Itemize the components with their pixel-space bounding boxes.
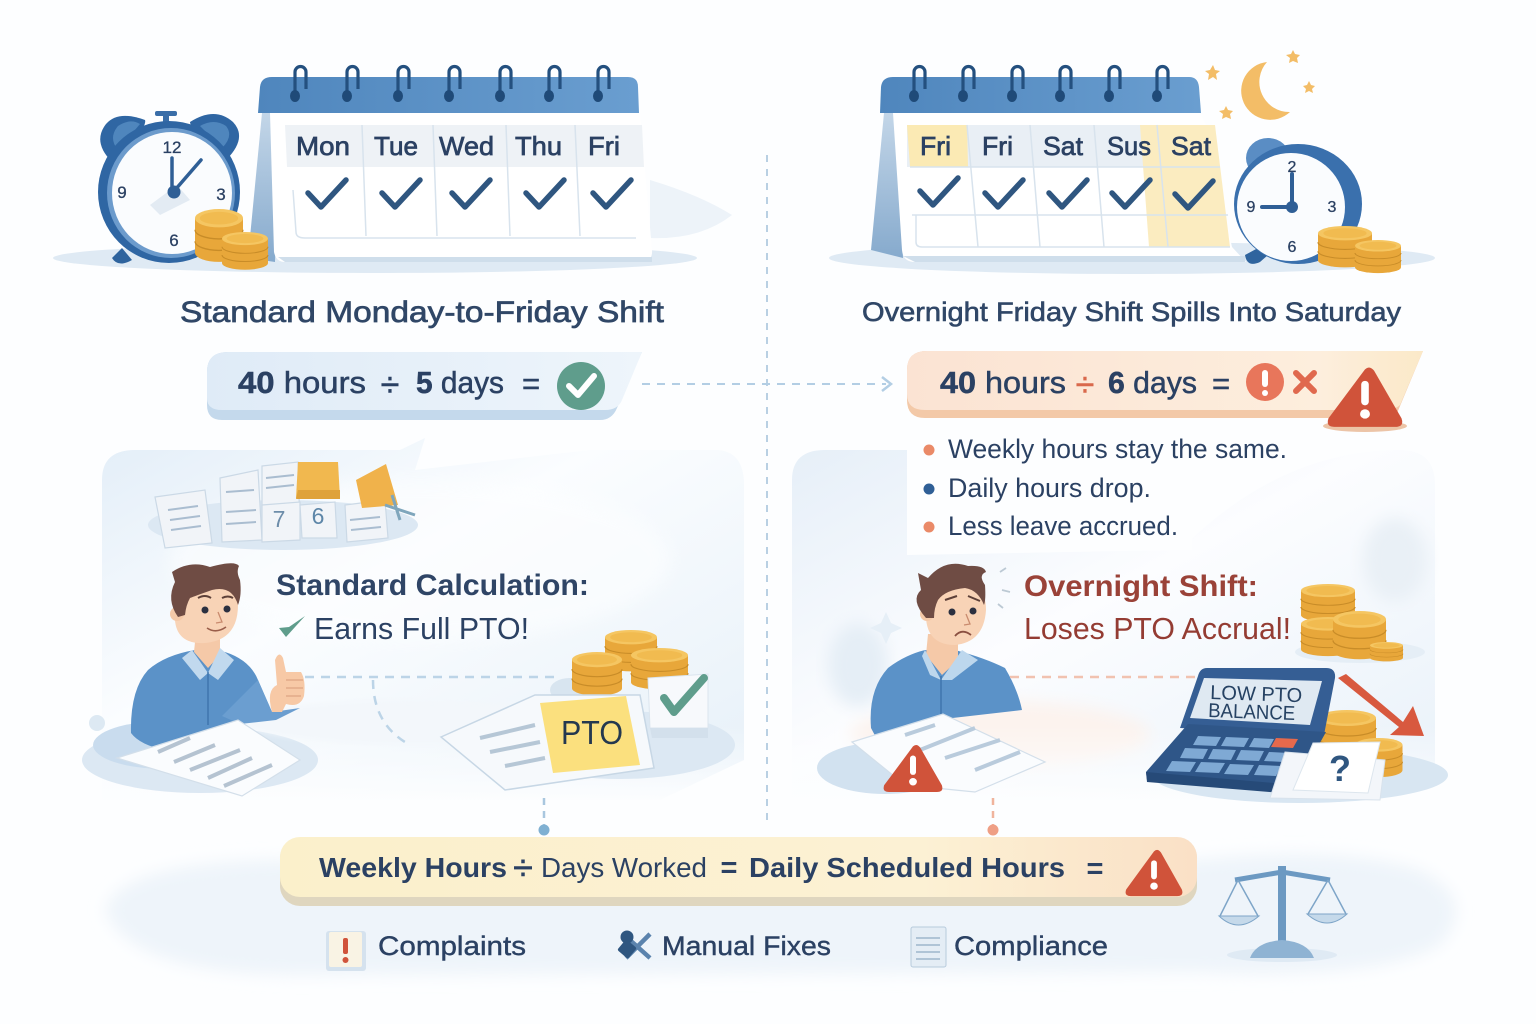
heading: standard shift: Standard Monday-to-Friday Shift [180, 296, 665, 329]
item: complaints: Complaints [378, 931, 526, 961]
left calendar: Tue [374, 131, 418, 161]
left alarm clock with coins [98, 111, 268, 270]
right alarm clock with coins [1234, 138, 1401, 273]
summary formula bar [280, 837, 1197, 906]
formula pill: standard: 40 hours [238, 365, 366, 400]
icon: coins right [1295, 584, 1425, 663]
left alarm clock with coins: 6 [169, 231, 179, 250]
text: earns full PTO: Earns Full PTO! [314, 611, 529, 646]
right alarm clock with coins: 2 [1288, 159, 1297, 176]
connector: overnight dashed line [1010, 676, 1200, 678]
card with green check [648, 674, 708, 738]
icon: paper and calendar pile [148, 462, 418, 550]
PTO coins [572, 630, 688, 696]
right calendar: Sat [1171, 131, 1212, 161]
bullet list: Less leave accrued. [948, 511, 1178, 541]
right alarm clock with coins: 9 [1247, 199, 1256, 216]
calculator: BALANCE [1208, 700, 1296, 725]
formula pill: standard [207, 352, 642, 420]
summary formula bar: ÷ [513, 847, 533, 888]
heading: overnight shift result: Overnight Shift: [1024, 570, 1258, 603]
right calendar [871, 66, 1246, 262]
formula pill: standard: ÷ [381, 366, 399, 404]
formula pill: overnight: 40 hours [940, 365, 1066, 400]
left calendar: Thu [515, 131, 562, 161]
formula pill: overnight: 6 days [1108, 365, 1197, 400]
shadow under right calendar [829, 242, 1435, 274]
paper: left document [117, 720, 300, 796]
item: compliance [911, 927, 1108, 967]
connector: left dashed path [305, 677, 555, 745]
arrow: downward red [1338, 674, 1424, 736]
item: compliance: Compliance [954, 931, 1108, 961]
formula pill: overnight: ÷ [1076, 366, 1094, 404]
formula pill: overnight: = [1212, 366, 1230, 401]
icon: balance scale [1219, 866, 1347, 962]
left calendar: Fri [588, 131, 620, 161]
moon and stars [1205, 50, 1315, 120]
icon: small green check [279, 616, 305, 637]
left calendar [248, 66, 652, 262]
desk blobs left [82, 678, 735, 793]
formula pill: standard: 5 days [416, 365, 504, 400]
panel: left scenario background [95, 438, 750, 805]
calculator [1146, 668, 1448, 803]
summary formula bar: Daily Scheduled Hours [749, 852, 1065, 883]
bullet list: Weekly hours stay the same. [948, 434, 1287, 464]
item: complaints [326, 931, 526, 971]
summary formula bar: = [721, 852, 737, 884]
left calendar: Mon [296, 131, 350, 161]
heading: overnight shift: Overnight Friday Shift Spills Into Saturday [862, 297, 1402, 327]
icon: paper and calendar pile: 7 [273, 506, 285, 532]
panel: right scenario background [785, 450, 1445, 805]
bullet list: Daily hours drop. [948, 473, 1151, 503]
person: happy employee [89, 563, 305, 769]
divider: centre dashed line [766, 155, 768, 826]
right calendar: Fri [982, 131, 1013, 161]
paper with warning [852, 714, 1045, 792]
summary formula bar: Days Worked [541, 852, 707, 883]
right calendar: Sat [1043, 131, 1084, 161]
right alarm clock with coins: 6 [1288, 239, 1297, 256]
formula pill: standard: = [522, 366, 540, 401]
formula pill: overnight [907, 351, 1423, 432]
icon: paper and calendar pile: 6 [312, 503, 324, 529]
left alarm clock with coins: 9 [117, 183, 127, 202]
left alarm clock with coins: 3 [216, 185, 226, 204]
right calendar: Fri [920, 131, 951, 161]
left alarm clock with coins: 12 [163, 138, 181, 157]
calculator: ? [1329, 748, 1351, 789]
left calendar: Wed [439, 131, 494, 161]
summary formula bar: = [1087, 853, 1103, 885]
PTO document with sticky note [441, 695, 654, 790]
person: worried employee [817, 564, 1022, 794]
dashed arrow between pills [642, 377, 891, 391]
bullet list [907, 425, 1287, 550]
panel: bottom summary background [105, 854, 1456, 975]
calculator: LOW PTO [1210, 682, 1303, 707]
item: manual fixes: Manual Fixes [662, 931, 831, 961]
text: loses PTO accrual: Loses PTO Accrual! [1024, 611, 1291, 646]
right calendar: Sus [1107, 131, 1151, 161]
right alarm clock with coins: 3 [1328, 199, 1337, 216]
heading: standard calculation: Standard Calculation: [276, 569, 589, 602]
connector dot orange [988, 798, 998, 836]
PTO document with sticky note: PTO [561, 714, 623, 751]
summary formula bar: Weekly Hours [319, 852, 507, 883]
connector dots to formula [538, 798, 550, 836]
shadow under left calendar [53, 243, 697, 273]
